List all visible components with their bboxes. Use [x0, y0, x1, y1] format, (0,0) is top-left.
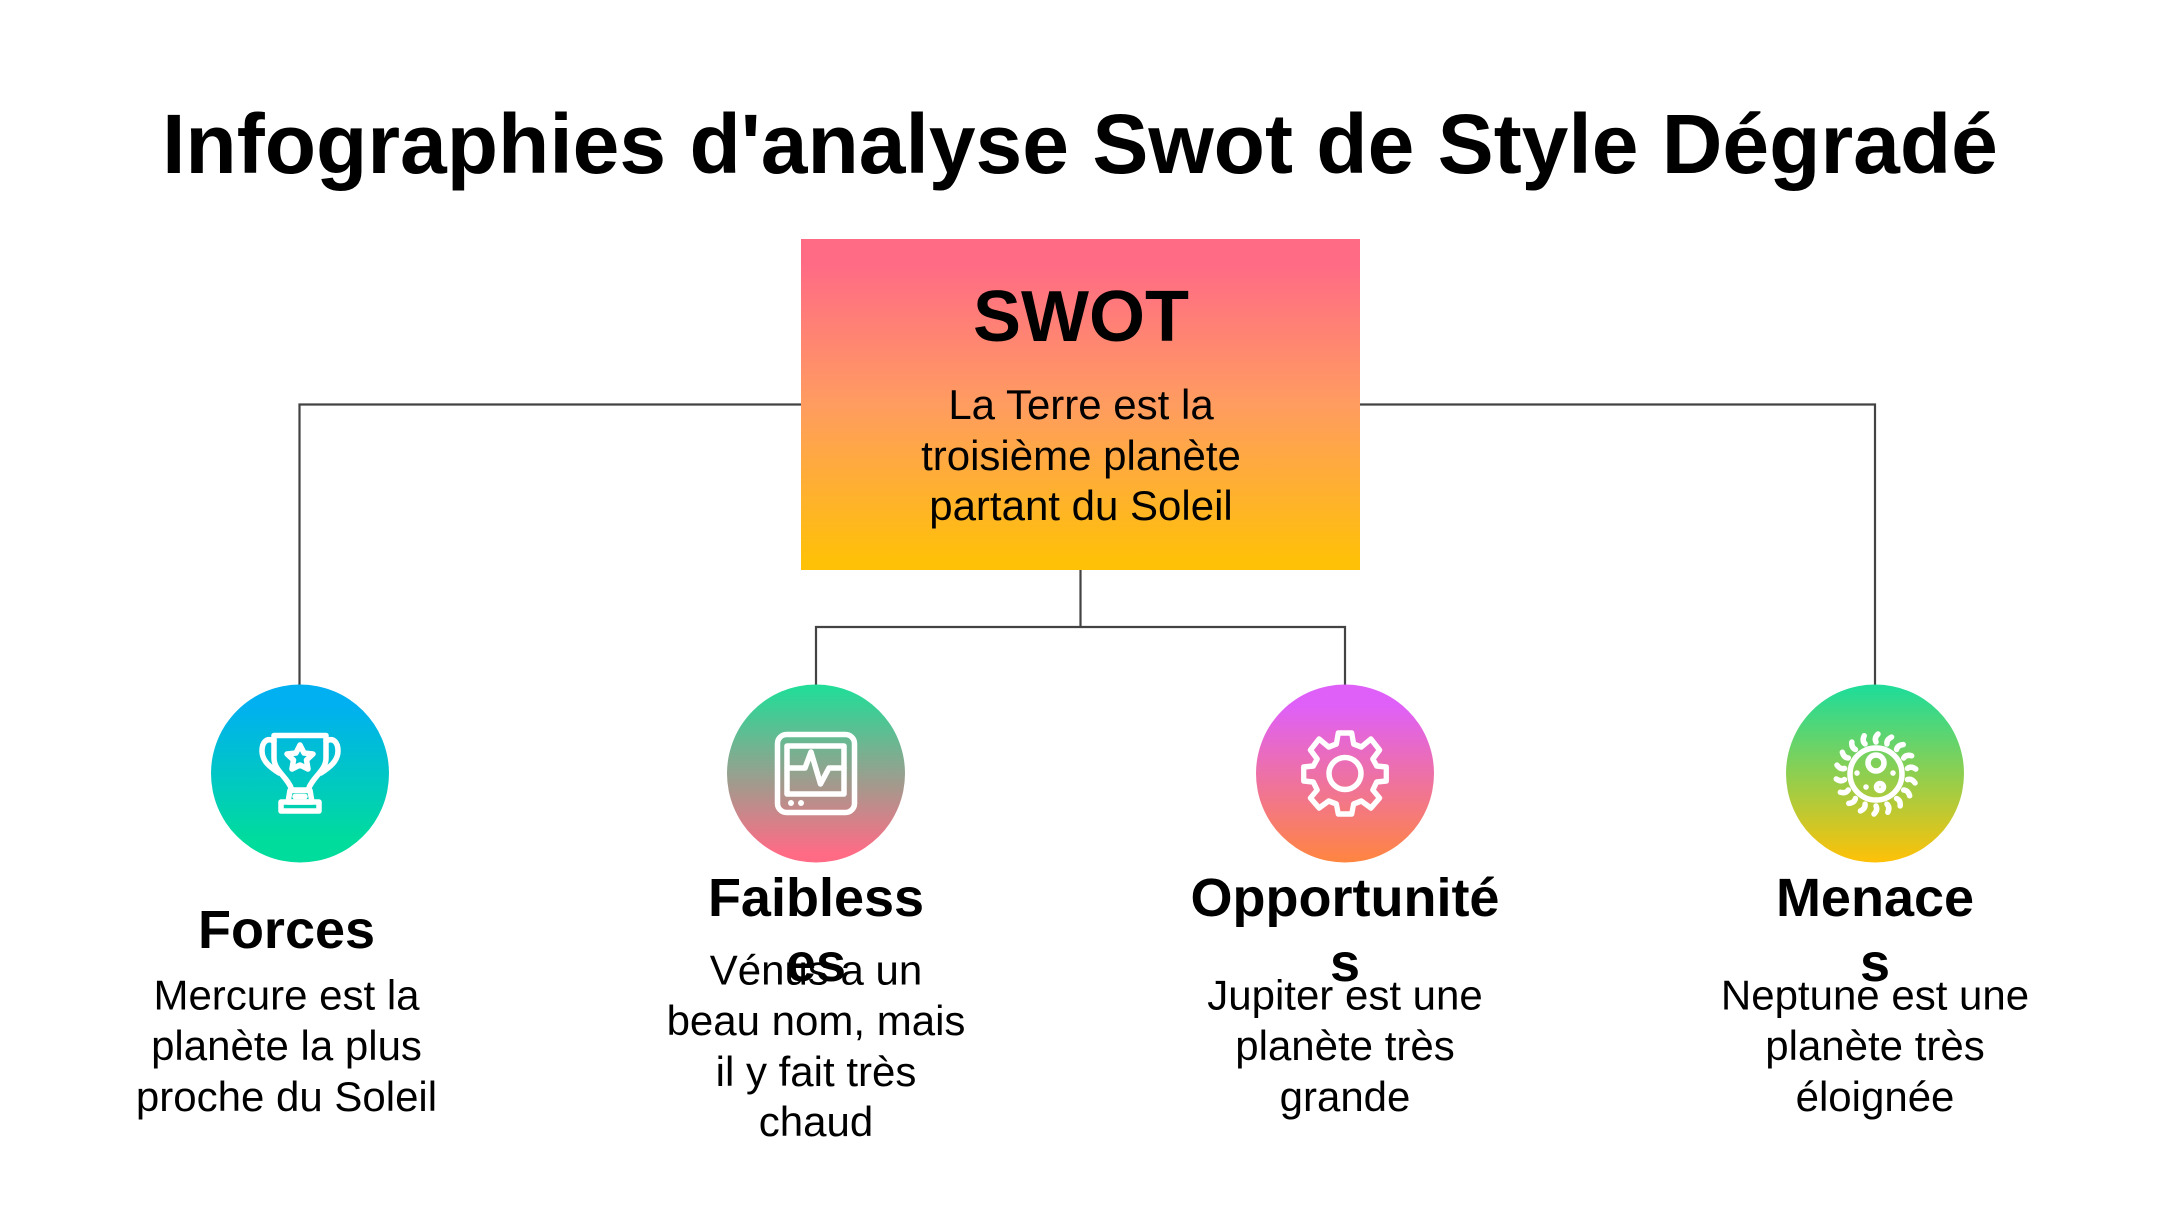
- text: SWOT description: troisième planète: [921, 432, 1241, 479]
- connector: center box to Forces: [300, 404, 801, 685]
- text: Faiblesses description: beau nom, mais: [667, 997, 965, 1044]
- text: Opportunités description: Jupiter est une: [1207, 972, 1483, 1018]
- heading: Opportunités: s: [1330, 933, 1360, 993]
- heading: Opportunités: Opportunité: [1191, 868, 1499, 928]
- heading: Faiblesses: Faibless: [708, 868, 924, 928]
- icon circle: Opportunités gear: [1256, 684, 1434, 862]
- icon circle: Menaces virus: [1786, 684, 1964, 862]
- text: Faiblesses description: Vénus a un: [710, 946, 922, 994]
- panel: SWOT center box: [801, 239, 1360, 570]
- text: SWOT description: partant du Soleil: [929, 482, 1233, 529]
- text: Menaces description: planète très: [1765, 1022, 1985, 1069]
- text: Forces description: proche du Soleil: [136, 1073, 437, 1120]
- icon circle: Forces trophy: [211, 684, 389, 862]
- connector: center box to Menaces: [1360, 404, 1875, 685]
- text: Forces description: planète la plus: [151, 1022, 422, 1069]
- heading: Forces: Forces: [198, 900, 375, 960]
- block: Opportunités: [1191, 868, 1499, 1120]
- heading: Faiblesses: es: [786, 933, 846, 993]
- text: Menaces description: éloignée: [1796, 1073, 1954, 1120]
- text: SWOT description: La Terre est la: [948, 381, 1214, 428]
- text: Faiblesses description: chaud: [759, 1098, 873, 1145]
- heading: SWOT: SWOT: [973, 277, 1189, 357]
- connector: center box to Faiblesses and Opportunités: [816, 570, 1345, 685]
- heading: Menaces: Menace: [1776, 868, 1974, 928]
- block: Faiblesses: [667, 868, 965, 1145]
- heading: Menaces: s: [1860, 933, 1890, 993]
- text: Opportunités description: grande: [1280, 1073, 1410, 1120]
- block: Forces: [136, 900, 437, 1120]
- text: Opportunités description: planète très: [1235, 1022, 1455, 1069]
- title: Infographies d'analyse Swot de Style Dégradé: [162, 97, 1998, 191]
- text: Menaces description: Neptune est une: [1721, 972, 2029, 1018]
- icon circle: Faiblesses monitor: [727, 684, 905, 862]
- text: Faiblesses description: il y fait très: [716, 1048, 916, 1095]
- text: Forces description: Mercure est la: [153, 972, 420, 1018]
- block: Menaces: [1721, 868, 2029, 1120]
